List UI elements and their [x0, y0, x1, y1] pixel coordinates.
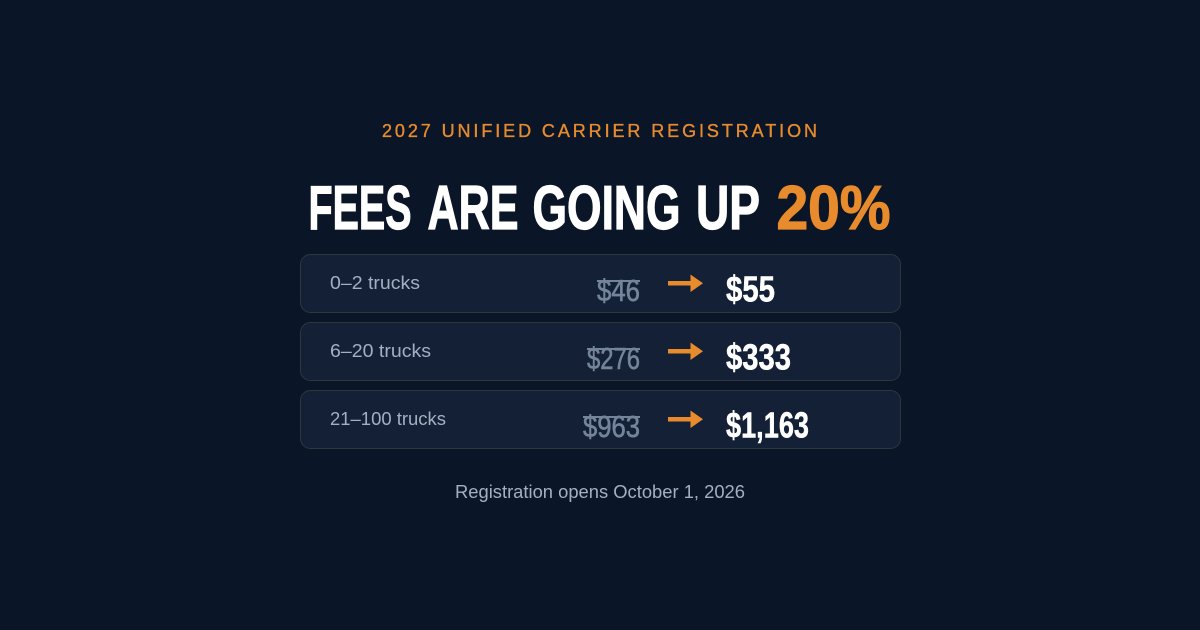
title [308, 174, 890, 243]
row: 0–2 trucks [300, 254, 900, 312]
arrow [668, 342, 703, 360]
old price with strike: $963 [583, 409, 640, 444]
new price: $333 [726, 336, 791, 378]
title: ARE [428, 174, 518, 243]
row: 21–100 trucks [300, 390, 900, 448]
old price with strike: $276 [587, 341, 640, 376]
title: GOING [532, 174, 680, 243]
arrow [668, 274, 703, 292]
footer note: Registration opens October 1, 2026 [455, 481, 745, 502]
title: FEES [308, 174, 412, 243]
title: 20% [776, 174, 890, 243]
new price: $1,163 [726, 404, 809, 446]
row: 6–20 trucks [300, 322, 900, 380]
truck range label: 21–100 trucks [330, 408, 446, 429]
title: UP [696, 174, 760, 243]
old price with strike: $46 [597, 273, 640, 308]
arrow [668, 410, 703, 428]
new price: $55 [726, 268, 775, 310]
truck range label: 6–20 trucks [330, 340, 431, 361]
truck range label: 0–2 trucks [330, 272, 420, 293]
eyebrow heading: 2027 UNIFIED CARRIER REGISTRATION [382, 121, 817, 141]
